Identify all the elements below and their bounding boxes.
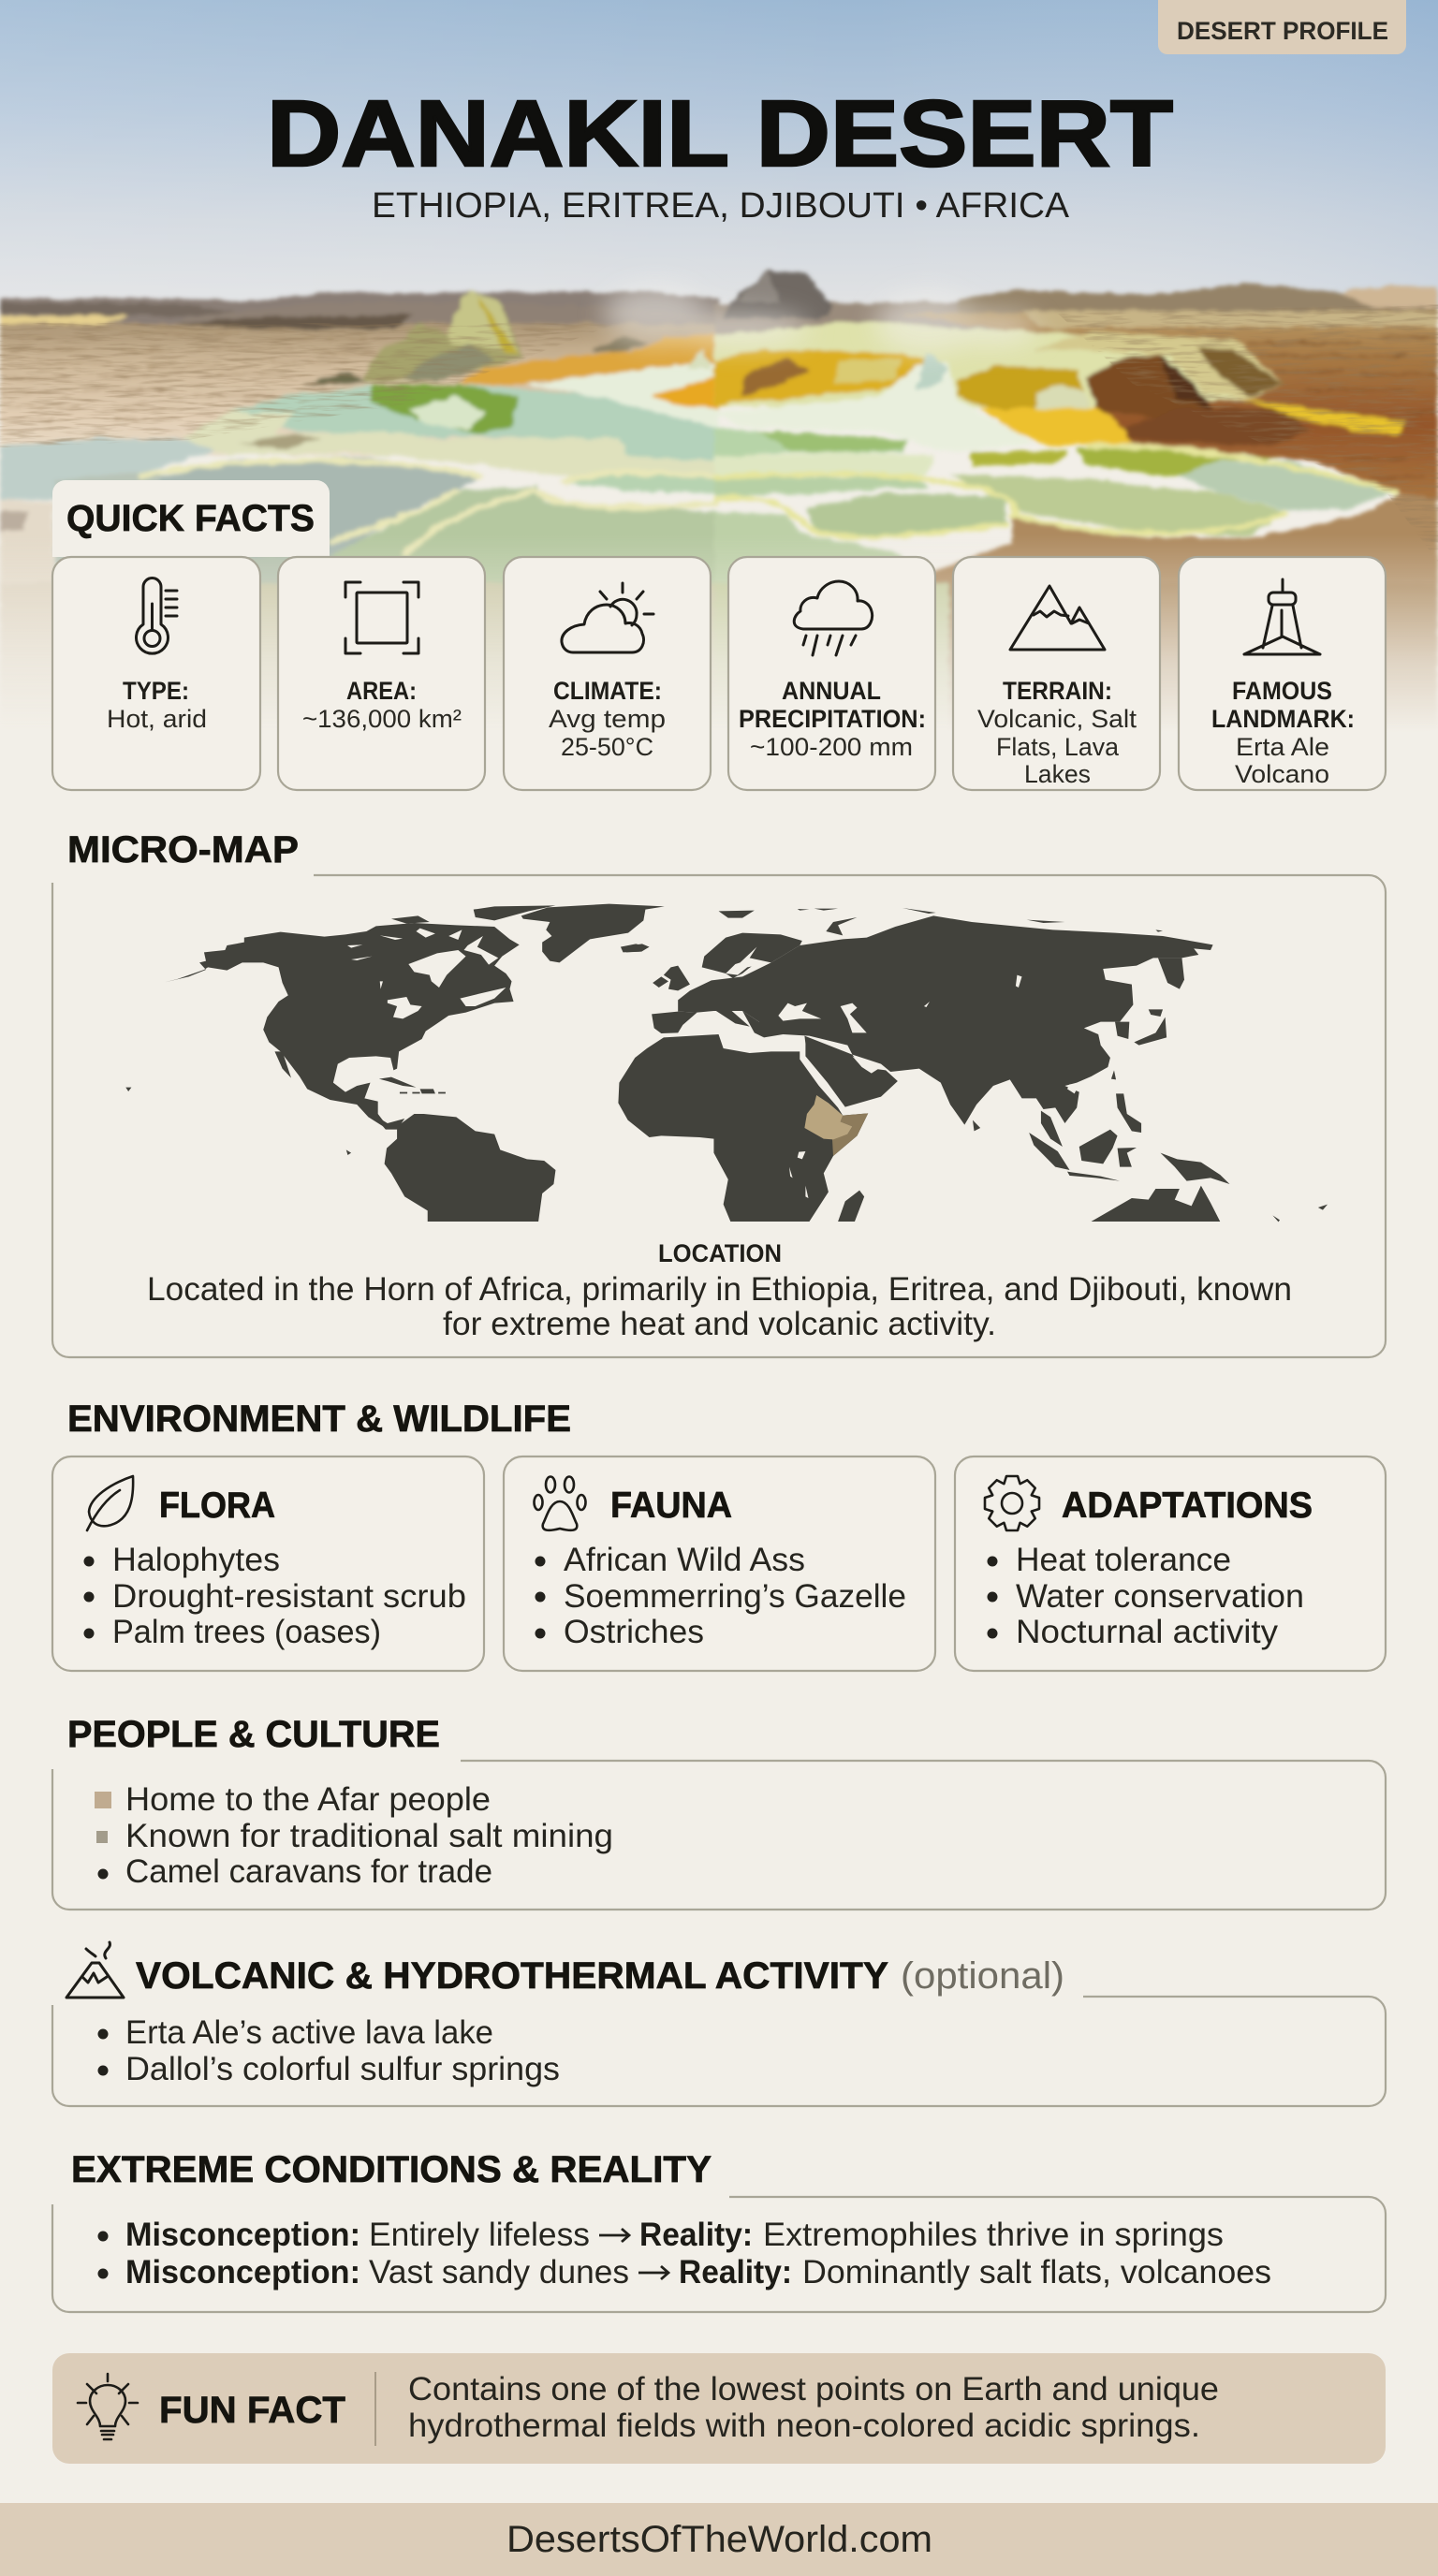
fact card: climate: Avg temp (549, 705, 666, 733)
fact card: climate: 25-50°C (561, 733, 653, 761)
panel: fauna (504, 1456, 935, 1671)
heading: micro-map: MICRO-MAP (67, 829, 299, 871)
section: volcanic and hydrothermal activity (52, 1942, 1386, 2106)
list: volcanic: Dallol’s colorful sulfur springs (125, 2051, 560, 2087)
icon: cloud and sun (562, 583, 653, 652)
location caption: for extreme heat and volcanic activity. (443, 1306, 996, 1342)
highlight: Horn of Africa (804, 1095, 868, 1156)
list: people and culture: Home to the Afar people (125, 1781, 491, 1818)
panel: flora: FLORA (159, 1486, 275, 1526)
list: people and culture: Camel caravans for trade (125, 1853, 492, 1890)
misconception two: Misconception: (125, 2254, 360, 2291)
location caption: LOCATION (658, 1239, 782, 1267)
panel: fauna: Ostriches (564, 1614, 704, 1650)
list: volcanic (97, 2014, 560, 2087)
footer: DesertsOfTheWorld.com (506, 2519, 932, 2560)
heading: volcanic and hydrothermal activity: VOLCANIC & HYDROTHERMAL ACTIVITY (136, 1955, 888, 1997)
callout: fun fact: FUN FACT (159, 2390, 345, 2431)
heading: people and culture: PEOPLE & CULTURE (67, 1714, 440, 1755)
panel: adaptations (955, 1456, 1386, 1671)
misconception two (97, 2254, 1271, 2291)
heading tab: quick facts: QUICK FACTS (66, 498, 315, 539)
fact card: annual precipitation: PRECIPITATION: (739, 705, 926, 733)
fact card: famous landmark: Erta Ale (1236, 733, 1329, 761)
map: americas (125, 904, 665, 1222)
location caption (147, 1239, 1292, 1342)
badge: desert profile: DESERT PROFILE (1177, 17, 1388, 45)
fact card: annual precipitation: ~100-200 mm (750, 733, 913, 761)
panel outline: micro-map (52, 875, 1386, 1357)
icon: light bulb (78, 2374, 138, 2439)
panel outline: volcanic (52, 1997, 1386, 2106)
fact card: climate: CLIMATE: (553, 677, 662, 705)
hero left half (0, 292, 719, 733)
panel: adaptations: Heat tolerance (1016, 1542, 1231, 1578)
panel outline: extreme conditions (52, 2197, 1386, 2312)
list: people and culture (95, 1781, 613, 1890)
panel: adaptations: Water conservation (1016, 1578, 1304, 1615)
heading: extreme conditions and reality: EXTREME CONDITIONS & REALITY (71, 2149, 712, 2190)
hero photo: Dallol hydrothermal landscape (0, 0, 1438, 768)
fact card: terrain: Volcanic, Salt (977, 705, 1137, 733)
sediment texture on the ground (0, 300, 1438, 571)
callout: fun fact (52, 2353, 1386, 2464)
fact card: annual precipitation: ANNUAL (782, 677, 881, 705)
section: environment and wildlife (52, 1398, 1386, 1671)
panel: adaptations: Nocturnal activity (1016, 1614, 1279, 1650)
misconception two: Dominantly salt flats, volcanoes (802, 2254, 1271, 2291)
icon: area frame (345, 582, 418, 653)
section: people and culture (52, 1714, 1386, 1910)
fact card: type: TYPE: (123, 677, 189, 705)
fact card: terrain: Lakes (1024, 760, 1091, 788)
misconception one (97, 2217, 1224, 2253)
misconception one: Entirely lifeless (369, 2217, 590, 2253)
list: volcanic: Erta Ale’s active lava lake (125, 2014, 493, 2051)
panel: flora: Halophytes (112, 1542, 280, 1578)
footer (0, 2503, 1438, 2576)
panel: flora: Palm trees (oases) (112, 1614, 381, 1650)
world map (125, 904, 1328, 1222)
heading: volcanic and hydrothermal activity: (optional) (901, 1955, 1064, 1997)
heading tab: quick facts (52, 480, 330, 557)
steam plumes (604, 284, 1039, 355)
badge: desert profile (1158, 0, 1406, 54)
fact card: type (52, 557, 260, 790)
fact card: annual precipitation (728, 557, 935, 790)
icon: thermometer (137, 578, 177, 653)
misconception one: Reality: (639, 2217, 753, 2253)
fact card: terrain: TERRAIN: (1003, 677, 1112, 705)
icon: gear (985, 1476, 1039, 1530)
fact card: type: Hot, arid (107, 705, 207, 733)
panel: flora (52, 1456, 484, 1671)
icon: mountains (1010, 586, 1105, 650)
misconception one: Extremophiles thrive in springs (763, 2217, 1224, 2253)
map: eurasia, africa, oceania (618, 908, 1328, 1222)
misconception one: Misconception: (125, 2217, 360, 2253)
callout: fun fact: Contains one of the lowest points on Earth and unique (408, 2371, 1219, 2408)
fact card: famous landmark: FAMOUS (1232, 677, 1332, 705)
fact card: area: ~136,000 km² (302, 705, 462, 733)
location caption: Located in the Horn of Africa, primarily in Ethiopia, Eritrea, and Djibouti, known (147, 1271, 1292, 1308)
hero right half (714, 270, 1438, 733)
section: extreme conditions and reality (52, 2149, 1386, 2312)
fact card: terrain: Flats, Lava (996, 733, 1120, 761)
fact card: famous landmark (1179, 557, 1386, 790)
fact card: area: AREA: (346, 677, 417, 705)
section: micro-map (52, 829, 1386, 1357)
panel: adaptations: ADAPTATIONS (1062, 1486, 1313, 1526)
section: quick facts (52, 480, 1386, 790)
subtitle: ETHIOPIA, ERITREA, DJIBOUTI • AFRICA (372, 186, 1070, 226)
panel outline: people and culture (52, 1761, 1386, 1910)
callout: fun fact: hydrothermal fields with neon-colored acidic springs. (408, 2408, 1200, 2444)
panel: fauna: Soemmerring’s Gazelle (564, 1578, 906, 1615)
panel: fauna: FAUNA (610, 1486, 732, 1526)
icon: erupting volcano (66, 1942, 124, 1998)
fact card: famous landmark: LANDMARK: (1211, 705, 1355, 733)
fact card: terrain (953, 557, 1160, 790)
list: people and culture: Known for traditional salt mining (125, 1818, 613, 1854)
icon: leaf (87, 1476, 133, 1530)
panel: fauna: African Wild Ass (564, 1542, 805, 1578)
fact card: climate (504, 557, 711, 790)
misconception two: Reality: (679, 2254, 792, 2291)
icon: volcano landmark tower (1244, 579, 1320, 654)
misconception two: Vast sandy dunes (369, 2254, 629, 2291)
fact card: area (278, 557, 485, 790)
panel: flora: Drought-resistant scrub (112, 1578, 466, 1615)
fact card: famous landmark: Volcano (1235, 760, 1329, 788)
icon: rain cloud (794, 581, 873, 655)
heading: environment and wildlife: ENVIRONMENT & WILDLIFE (67, 1398, 571, 1440)
icon: paw print (534, 1477, 586, 1530)
title: DANAKIL DESERT (267, 81, 1173, 186)
